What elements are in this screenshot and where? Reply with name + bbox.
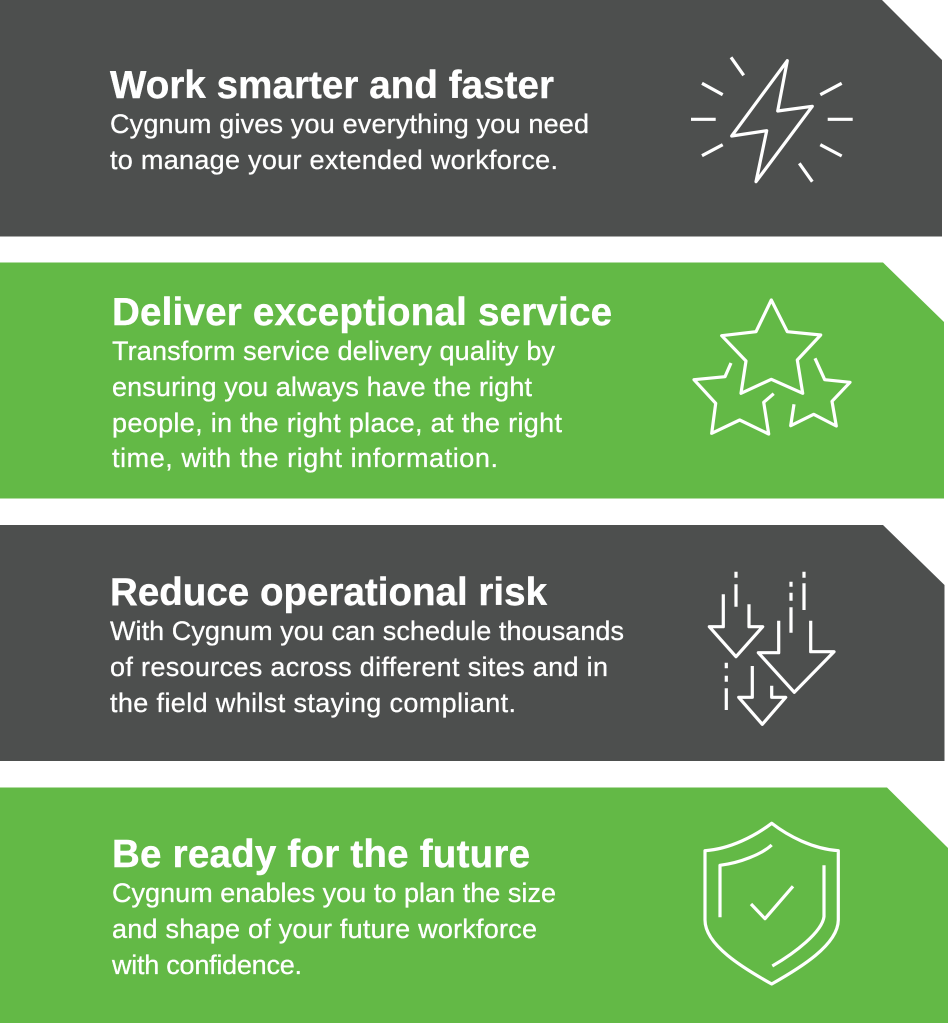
text block: deliver service description: people, in the right place, at the right xyxy=(112,408,562,438)
panel: be ready for the future xyxy=(0,788,948,1023)
text block: deliver service description: ensuring you always have the right xyxy=(112,372,532,402)
icon: falling arrows xyxy=(709,572,834,724)
heading: be ready for the future: Be ready for the future xyxy=(112,833,530,876)
heading: reduce operational risk: Reduce operational risk xyxy=(110,571,548,614)
text block: work smarter description xyxy=(110,109,589,175)
icon: lightning bolt with rays xyxy=(691,57,853,182)
heading: deliver exceptional service: Deliver exceptional service xyxy=(112,291,612,334)
text block: future description: Cygnum enables you to plan the size xyxy=(112,878,556,908)
text block: work smarter description: to manage your extended workforce. xyxy=(110,145,558,175)
text block: deliver service description: time, with the right information. xyxy=(112,443,498,473)
text block: deliver service description: Transform service delivery quality by xyxy=(112,336,556,366)
text block: reduce risk description xyxy=(110,616,624,718)
text block: reduce risk description: the field whilst staying compliant. xyxy=(110,688,516,718)
text block: reduce risk description: With Cygnum you can schedule thousands xyxy=(110,616,624,646)
icon: three stars xyxy=(694,300,850,434)
panel: work smarter and faster xyxy=(0,0,942,236)
icon: shield with check xyxy=(705,823,838,984)
text block: future description: with confidence. xyxy=(111,950,302,980)
text block: work smarter description: Cygnum gives you everything you need xyxy=(110,109,589,139)
heading: work smarter and faster: Work smarter and faster xyxy=(110,64,554,107)
panel: reduce operational risk xyxy=(0,525,944,761)
text block: future description: and shape of your future workforce xyxy=(112,914,537,944)
text block: deliver service description xyxy=(112,336,562,473)
text block: future description xyxy=(111,878,556,980)
text block: reduce risk description: of resources across different sites and in xyxy=(110,652,608,682)
panel: deliver exceptional service xyxy=(0,262,944,498)
